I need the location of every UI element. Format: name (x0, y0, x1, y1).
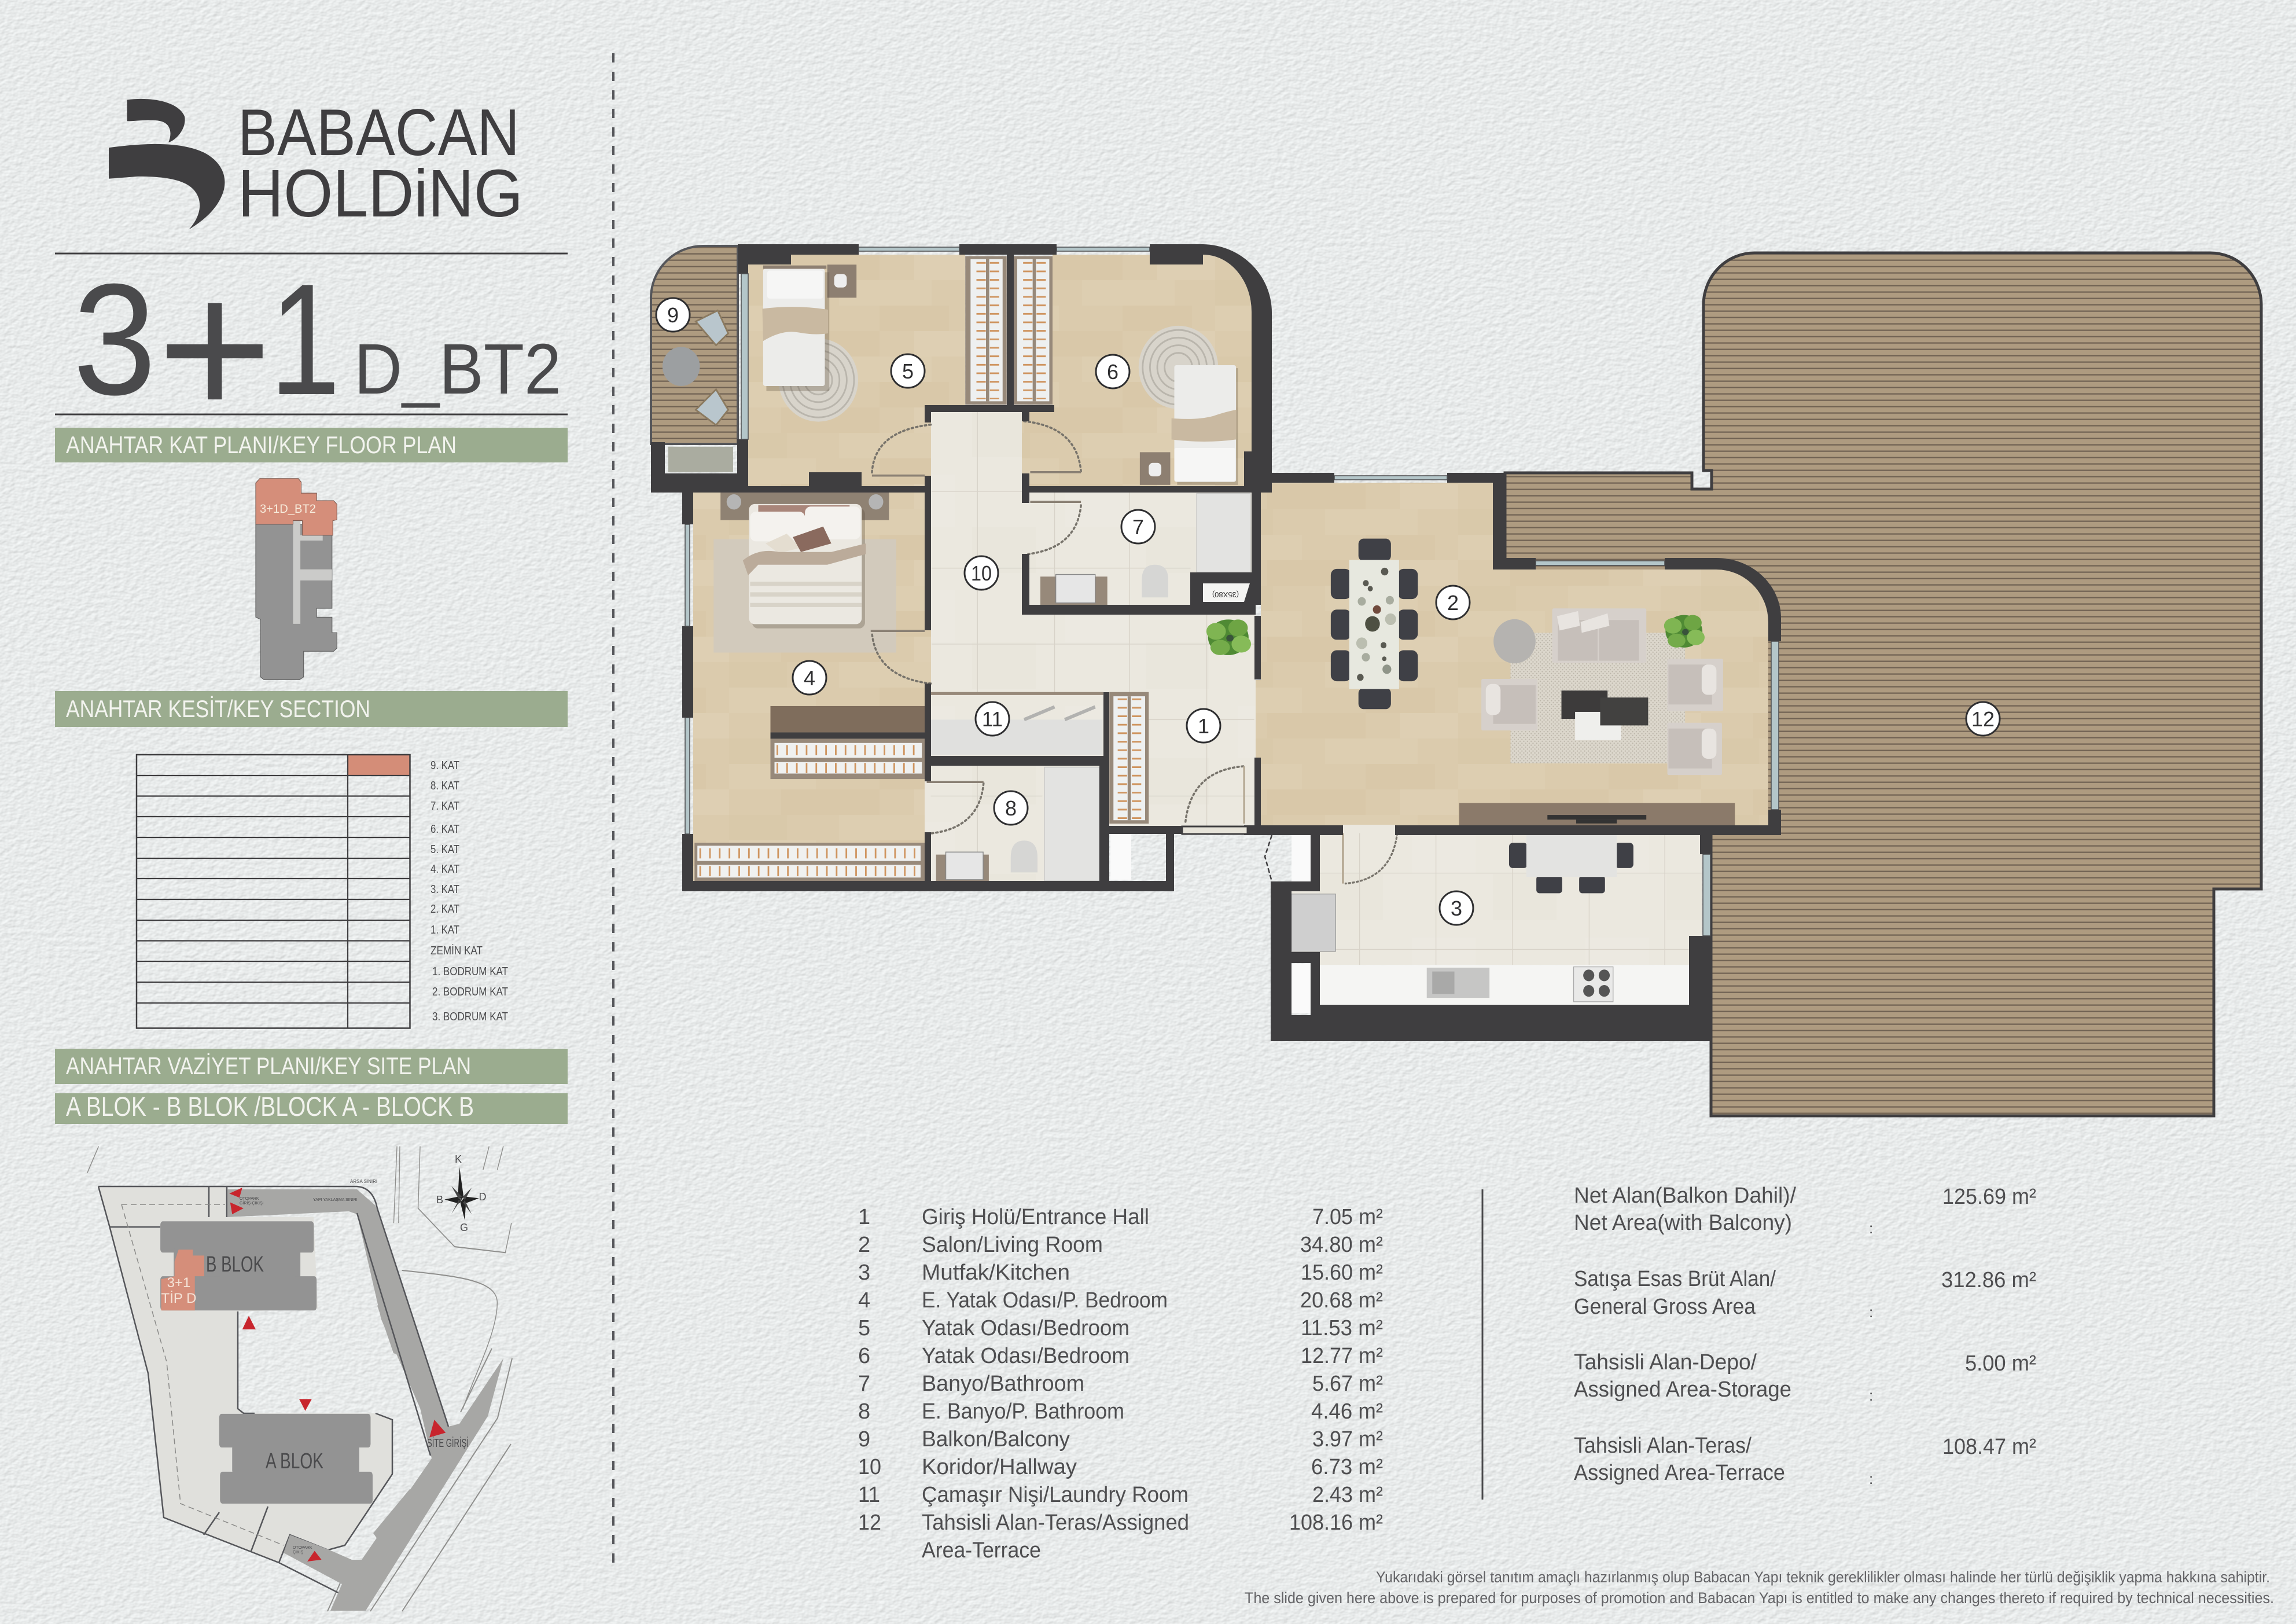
logo wordmark: BABACAN (238, 96, 520, 170)
storage area: : (1869, 1387, 1873, 1404)
terrace area: Assigned Area-Terrace (1574, 1461, 1785, 1485)
marker 5: 5 (902, 359, 914, 383)
entrance closet (1109, 692, 1149, 824)
title: 3+1 D_BT2 (73, 239, 561, 459)
entrance door threshold (1182, 826, 1248, 834)
master bedroom furniture (713, 493, 896, 653)
room area table (858, 1205, 1383, 1563)
zoom-4 furniture: living room and kitchen (1292, 539, 1735, 1005)
heading: block A block B: A BLOK - B BLOK /BLOCK A - BLOCK B (66, 1091, 474, 1122)
row 2: Salon/Living Room (922, 1233, 1103, 1257)
icon: living plant (1664, 615, 1705, 648)
row 8 (858, 1399, 1383, 1424)
floor labels: 6. KAT (430, 823, 459, 836)
site plan labels: K (455, 1153, 462, 1165)
row 3: 3 (858, 1261, 870, 1285)
row 11: 2.43 m² (1312, 1483, 1383, 1507)
row 5 (858, 1316, 1383, 1340)
site boundary lines (98, 1186, 392, 1606)
marker 11: 11 (982, 707, 1003, 731)
bathroom 8 fixtures (936, 767, 1099, 881)
site plan labels: D (479, 1191, 486, 1203)
site ground (98, 1186, 392, 1563)
highlighted floor 9 (348, 755, 410, 776)
floor labels: 5. KAT (430, 843, 459, 856)
key floor plan diagram: 3+1D_BT2 (260, 502, 316, 516)
row 8: 8 (858, 1399, 870, 1424)
row 12: Tahsisli Alan-Teras/Assigned (922, 1511, 1189, 1535)
site plan labels: SİTE GİRİŞİ (427, 1436, 469, 1450)
site plan labels: ÇIKIŞ (293, 1550, 304, 1555)
heading: key site plan: ANAHTAR VAZİYET PLANI/KEY SITE PLAN (66, 1052, 471, 1079)
marker 4: 4 (804, 666, 815, 690)
site plan labels: YAPI YAKLAŞMA SINIRI (313, 1198, 358, 1202)
row 6 (858, 1344, 1383, 1368)
key section chart (137, 755, 508, 1028)
logo wordmark (238, 96, 523, 231)
row 4: E. Yatak Odası/P. Bedroom (922, 1288, 1168, 1313)
kitchen counter (1320, 965, 1690, 1005)
title: 3+1 D_BT2: 1 (270, 251, 340, 428)
storage box with mirrored size note: (35X80) (1212, 590, 1239, 599)
area totals (1574, 1184, 2036, 1487)
tile grid lines (931, 412, 1702, 965)
setback dashes (122, 1204, 284, 1545)
marker 2 (1436, 586, 1470, 619)
floor labels (430, 759, 508, 1023)
marker 10: 10 (971, 561, 992, 585)
master bedroom closets (694, 706, 925, 881)
marker 3 (1440, 891, 1473, 925)
balcony deck (651, 246, 738, 444)
net area: 125.69 m² (1942, 1185, 2036, 1209)
floor labels: 9. KAT (430, 759, 459, 772)
net area (1574, 1184, 2036, 1237)
row 11: 11 (858, 1483, 880, 1507)
row 4: 20.68 m² (1300, 1288, 1383, 1313)
terrace deck (1505, 253, 2261, 1116)
floor labels: ZEMİN KAT (430, 944, 483, 957)
parking strips (373, 1300, 414, 1539)
bedroom 5 furniture (762, 264, 858, 422)
row 12: 108.16 m² (1289, 1511, 1383, 1535)
row 7: 5.67 m² (1312, 1372, 1383, 1396)
floor labels: 7. KAT (430, 800, 459, 813)
marker 11 (976, 702, 1009, 736)
icon: hall plant (1206, 619, 1251, 655)
disclaimer (1245, 1568, 2274, 1607)
road (227, 1189, 503, 1611)
row 5: 5 (858, 1316, 870, 1340)
closets 5 and 6 (965, 256, 1053, 405)
row 10: 6.73 m² (1311, 1455, 1383, 1479)
heading: key floor plan: ANAHTAR KAT PLANI/KEY FLOOR PLAN (66, 431, 457, 458)
row 7 (858, 1372, 1383, 1396)
gross area (1574, 1267, 2036, 1321)
title: 3+1 D_BT2: + (157, 239, 273, 459)
door swings (871, 421, 1244, 833)
row 7: 7 (858, 1372, 870, 1396)
row 1: Giriş Holü/Entrance Hall (922, 1205, 1149, 1229)
marker 4 (793, 661, 826, 695)
heading: key section: ANAHTAR KESİT/KEY SECTION (66, 695, 370, 722)
storage area (1574, 1350, 2036, 1404)
row 4 (858, 1288, 1383, 1313)
row 9: 3.97 m² (1312, 1427, 1383, 1452)
marker 9 (656, 298, 690, 332)
gross area: General Gross Area (1574, 1295, 1756, 1319)
balcony furniture (663, 310, 733, 472)
site plan (87, 1147, 512, 1611)
row 2: 2 (858, 1233, 870, 1257)
row 3: Mutfak/Kitchen (922, 1261, 1070, 1285)
storage area: Tahsisli Alan-Depo/ (1574, 1350, 1757, 1375)
row 1: 7.05 m² (1312, 1205, 1383, 1229)
marker 2: 2 (1447, 591, 1459, 615)
row 5: Yatak Odası/Bedroom (922, 1316, 1129, 1340)
row 7: Banyo/Bathroom (922, 1372, 1084, 1396)
row 3: 15.60 m² (1301, 1261, 1383, 1285)
floor labels: 1. KAT (430, 924, 459, 936)
terrace area: : (1869, 1470, 1873, 1487)
site plan labels: B BLOK (206, 1252, 264, 1277)
floor labels: 2. BODRUM KAT (432, 986, 508, 998)
marker 7 (1121, 510, 1155, 543)
site plan labels: A BLOK (266, 1449, 323, 1474)
net area: Net Area(with Balcony) (1574, 1211, 1792, 1235)
gross area: : (1869, 1303, 1873, 1321)
site plan labels: ARSA SINIRI (350, 1179, 377, 1184)
terrace area: 108.47 m² (1942, 1435, 2036, 1459)
road edge (227, 1186, 448, 1456)
row 4: 4 (858, 1288, 870, 1313)
terrace area: Tahsisli Alan-Teras/ (1574, 1434, 1752, 1458)
site plan labels: TİP D (161, 1291, 196, 1306)
marker 8 (994, 791, 1028, 825)
row 1: 1 (858, 1205, 870, 1229)
site plan labels: B (436, 1194, 443, 1206)
site plan labels: 3+1 (167, 1275, 190, 1291)
storage box with mirrored size note (1203, 583, 1250, 602)
bedroom 6 furniture (1139, 326, 1238, 485)
marker 12 (1966, 702, 2000, 736)
row 12: 12 (858, 1511, 881, 1535)
floor labels: 8. KAT (430, 780, 459, 792)
bathroom 7 fixtures (1040, 494, 1250, 605)
surrounding context lines (87, 1147, 512, 1409)
row 9: Balkon/Balcony (922, 1427, 1070, 1452)
walls and windows (651, 244, 1781, 1041)
icon: logo mark (109, 99, 225, 230)
marker 3: 3 (1451, 896, 1462, 920)
fridge (1292, 894, 1335, 951)
sidebar: identity and key plans (55, 96, 568, 1611)
kitchen table (1509, 833, 1633, 893)
marker 6 (1096, 355, 1129, 388)
row 2 (858, 1233, 1383, 1257)
floor plan (651, 244, 2261, 1116)
row 8: 4.46 m² (1311, 1399, 1383, 1424)
row 2: 34.80 m² (1300, 1233, 1383, 1257)
row 11 (858, 1483, 1383, 1507)
gross area: 312.86 m² (1941, 1268, 2036, 1292)
marker 12: 12 (1971, 707, 1995, 731)
heading: key section (55, 691, 568, 727)
windows (685, 247, 1779, 936)
title: 3+1 D_BT2: D_BT2 (354, 330, 561, 409)
coffee tables (1562, 690, 1648, 740)
row 12: Area-Terrace (922, 1538, 1041, 1563)
sofa set (1481, 608, 1723, 775)
living rug (1510, 633, 1685, 763)
tip D highlight (161, 1250, 204, 1310)
kitchen door swing (1343, 833, 1397, 884)
row 10: 10 (858, 1455, 881, 1479)
row 8: E. Banyo/P. Bathroom (922, 1399, 1124, 1424)
floor labels: 1. BODRUM KAT (432, 965, 508, 978)
marker 6: 6 (1107, 360, 1118, 384)
site plan labels: OTOPARK (293, 1546, 312, 1550)
marker 10 (965, 556, 998, 590)
icon: compass (444, 1167, 479, 1220)
row 9 (858, 1427, 1383, 1452)
shafts (1110, 834, 1311, 1013)
floor labels: 2. KAT (430, 903, 459, 916)
row 9: 9 (858, 1427, 870, 1452)
zoom-3 furniture: bedrooms, baths, hall (663, 256, 1251, 881)
dining table (1331, 539, 1418, 709)
marker 1: 1 (1198, 714, 1209, 738)
row 6: 6 (858, 1344, 870, 1368)
terrace area (1574, 1434, 2036, 1487)
floor labels: 3. KAT (430, 883, 459, 896)
row 12 (858, 1511, 1383, 1563)
row 6: Yatak Odası/Bedroom (922, 1344, 1129, 1368)
marker 5 (891, 354, 925, 388)
logo wordmark: HOLDiNG (238, 156, 523, 231)
floor labels: 3. BODRUM KAT (432, 1011, 508, 1023)
net area: Net Alan(Balkon Dahil)/ (1574, 1184, 1796, 1208)
block A (219, 1414, 373, 1504)
block B (160, 1221, 317, 1310)
tv unit (1459, 803, 1735, 825)
lower context lines (328, 1349, 512, 1611)
row 1 (858, 1205, 1383, 1229)
row 6: 12.77 m² (1301, 1344, 1383, 1368)
red direction arrows (229, 1188, 446, 1561)
row 5: 11.53 m² (1301, 1316, 1383, 1340)
title: 3+1 D_BT2: 3 (73, 251, 156, 428)
key floor plan diagram (256, 479, 337, 679)
floors: wood and tile (693, 255, 1768, 965)
logo: Babacan Holding (109, 96, 523, 231)
site plan labels: GİRİŞ-ÇIKIŞI (240, 1200, 264, 1206)
storage area: Assigned Area-Storage (1574, 1377, 1791, 1402)
marker 7: 7 (1132, 515, 1144, 539)
gross area: Satışa Esas Brüt Alan/ (1574, 1267, 1776, 1291)
marker 1 (1187, 709, 1220, 743)
marker 8: 8 (1005, 796, 1017, 820)
marker 9: 9 (667, 303, 679, 327)
row 3 (858, 1261, 1383, 1285)
net area: : (1869, 1219, 1873, 1237)
site plan labels (161, 1153, 486, 1555)
row 11: Çamaşır Nişi/Laundry Room (922, 1483, 1189, 1507)
row 10: Koridor/Hallway (922, 1455, 1077, 1479)
room number markers (656, 298, 2000, 925)
row 10 (858, 1455, 1383, 1479)
laundry niche (931, 692, 1103, 755)
storage area: 5.00 m² (1965, 1351, 2036, 1376)
site plan labels: G (460, 1222, 468, 1233)
floor labels: 4. KAT (430, 863, 459, 876)
site plan labels: OTOPARK (240, 1197, 259, 1201)
